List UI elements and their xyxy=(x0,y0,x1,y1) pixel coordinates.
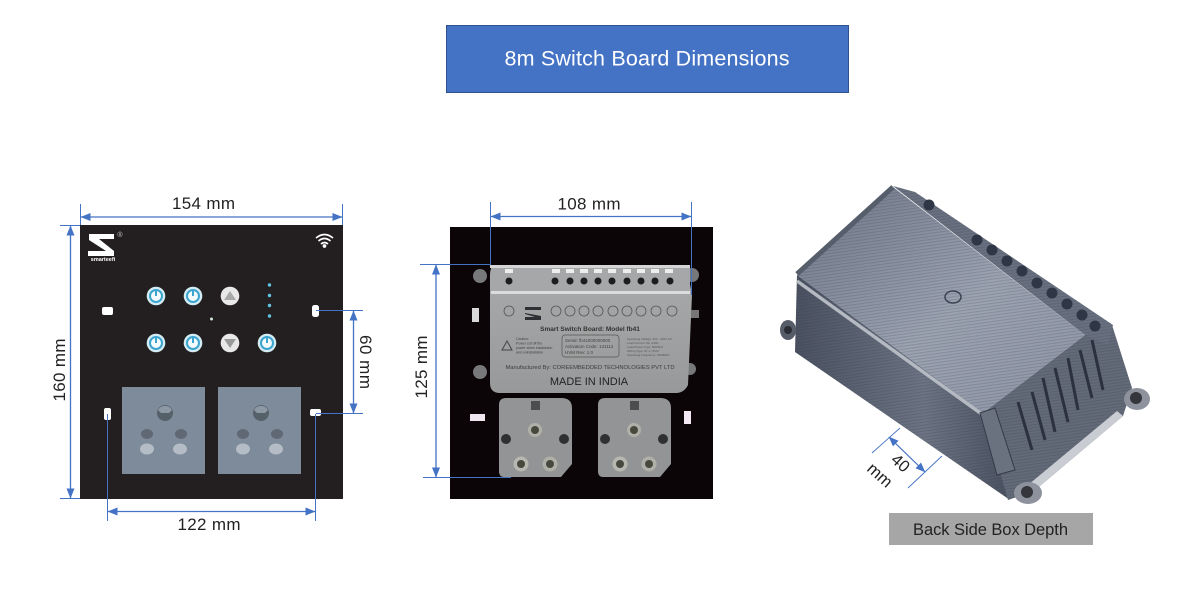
dimension: 160 mm xyxy=(50,226,80,498)
smart switch module: Wiring Type: IP-1 / IP20 xyxy=(627,349,659,353)
dimension: 108 mm: 108 mm xyxy=(558,194,620,214)
smart switch module: power when installation xyxy=(516,346,552,350)
dimension: 154 mm: 154 mm xyxy=(172,194,235,213)
terminal labels xyxy=(504,306,677,316)
label: back side box depth: Back Side Box Depth xyxy=(913,521,1068,539)
dimension: 125 mm: 125 mm xyxy=(412,336,431,398)
warning triangle xyxy=(502,341,512,350)
title: 8m Switch Board Dimensions xyxy=(504,46,790,70)
smart switch module: Caution: xyxy=(516,337,529,341)
smart switch module: Smart Switch Board: Model fb41 xyxy=(540,326,640,333)
touch buttons xyxy=(147,287,276,352)
dimension: 40 mm: 40 xyxy=(887,451,913,476)
title xyxy=(446,26,848,92)
icon: smarteefi logo xyxy=(88,231,123,263)
icon: smarteefi logo: smarteefi xyxy=(91,257,116,263)
mounting lugs xyxy=(780,320,1150,504)
left rim xyxy=(797,187,893,274)
fins xyxy=(1018,340,1103,450)
sockets xyxy=(122,387,301,474)
icon: smarteefi logo: ® xyxy=(117,231,123,239)
smart switch module: Load Power Type: 50/60Hz xyxy=(627,345,664,349)
mounting tabs xyxy=(473,268,699,379)
smart switch module: MADE IN INDIA xyxy=(550,376,629,388)
dimension: 154 mm xyxy=(80,194,342,225)
smart switch module: Manufactured By: COREEMBEDDED TECHNOLOGIES PVT LTD xyxy=(505,365,675,371)
smart switch module: Serial: fb41000000000 xyxy=(565,338,611,343)
activation label xyxy=(562,335,619,357)
dimension: 122 mm: 122 mm xyxy=(178,515,240,534)
smart switch module: Power cut off the xyxy=(516,342,542,346)
end wall xyxy=(983,325,1132,500)
dimension: 122 mm xyxy=(108,414,316,534)
icon: wifi xyxy=(316,234,333,247)
bottom flange xyxy=(1028,411,1123,491)
terminal caps xyxy=(505,269,673,273)
smart switch module: Operating Voltage: 110 - 240V AC xyxy=(627,337,673,341)
side wall xyxy=(795,275,1010,500)
corner post xyxy=(980,408,1015,475)
dimension: 40 mm xyxy=(863,428,942,491)
3D back box xyxy=(780,186,1150,504)
smart switch module: HVM Rev: 1.0 xyxy=(565,350,594,355)
rear of sockets xyxy=(499,398,671,477)
dimension: 108 mm xyxy=(490,194,692,295)
centre knob xyxy=(945,291,961,303)
smart switch module: Load Current: 6A, 240V xyxy=(627,341,659,345)
top face xyxy=(797,187,1085,413)
panel: rear of switch board xyxy=(450,227,713,499)
terminal holes xyxy=(506,278,674,284)
dimension: 60 mm xyxy=(316,310,375,414)
panel: front of switch board xyxy=(80,225,343,499)
label: back side box depth xyxy=(889,513,1093,545)
indicator dots xyxy=(210,283,271,320)
dimension: 60 mm: 60 mm xyxy=(356,335,375,389)
top terminal rail xyxy=(893,186,1113,345)
smart switch module xyxy=(490,265,692,393)
rear slots xyxy=(470,308,699,424)
terminal holes xyxy=(924,200,1100,332)
dimension: 125 mm xyxy=(412,264,511,478)
smart switch module: and uninstallation xyxy=(516,350,543,354)
smart switch module: Operating Frequency: 2400MHz xyxy=(627,353,670,357)
mounting slots xyxy=(102,305,321,420)
rim highlight xyxy=(797,281,983,415)
dimension: 160 mm: 160 mm xyxy=(50,338,69,402)
dimension: 40 mm: mm xyxy=(863,460,896,491)
smart switch module: Activation Code: 131112 xyxy=(565,344,614,349)
